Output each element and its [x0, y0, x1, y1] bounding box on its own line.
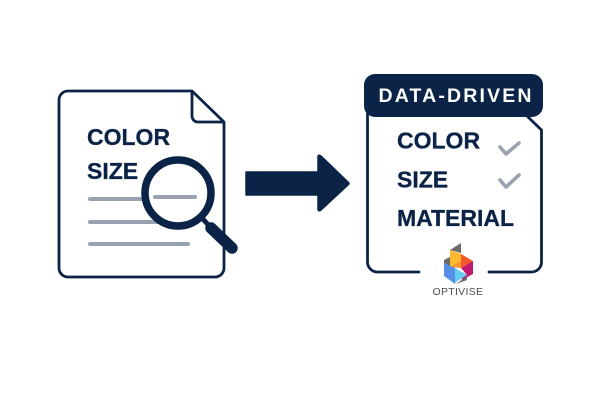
logo mark — [444, 243, 473, 284]
icon: check — [500, 175, 519, 187]
logo wordmark: OPTIVISE — [432, 286, 483, 298]
document fold — [192, 91, 224, 122]
icon: check — [500, 143, 519, 154]
text: MATERIAL: MATERIAL — [397, 205, 514, 231]
header badge — [364, 74, 543, 117]
placeholder text lines — [90, 199, 188, 244]
document outline — [59, 91, 224, 277]
document outline — [368, 110, 542, 272]
text: COLOR: COLOR — [397, 128, 480, 154]
logo: Optivise — [432, 243, 483, 298]
arrow — [246, 155, 349, 211]
text: SIZE: SIZE — [87, 158, 138, 184]
icon: magnifying glass — [145, 160, 232, 248]
panel: source document — [59, 91, 232, 277]
panel: data-driven document — [364, 74, 543, 272]
text: SIZE: SIZE — [397, 166, 448, 192]
heading: DATA-DRIVEN: DATA-DRIVEN — [378, 85, 532, 107]
text: COLOR: COLOR — [87, 124, 170, 150]
